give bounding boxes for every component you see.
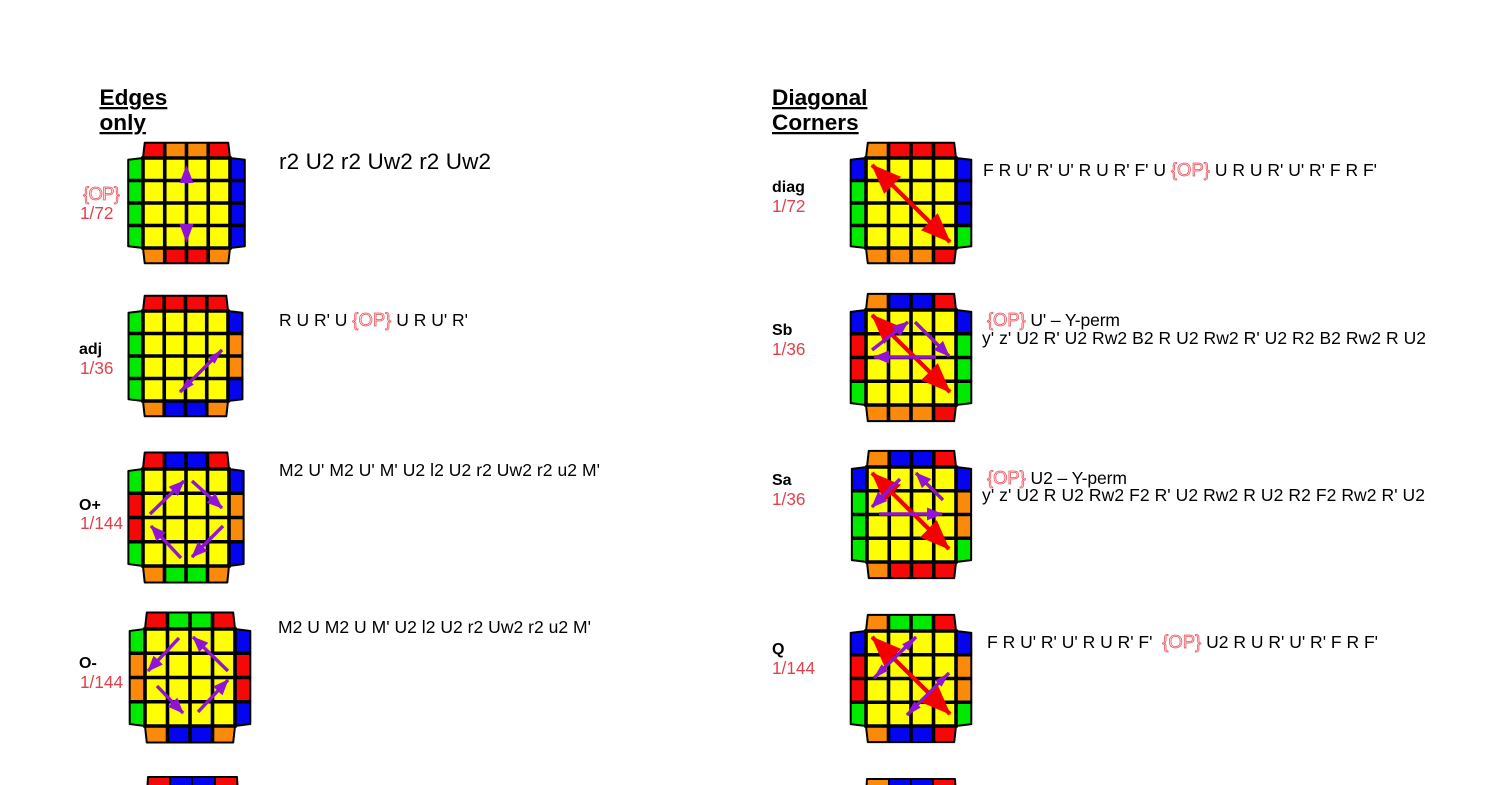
heading: Diagonal Corners bbox=[772, 85, 867, 135]
arrows: Sb bbox=[872, 315, 950, 392]
case label: O-: O- bbox=[79, 655, 97, 672]
cube: O+ bbox=[128, 453, 244, 582]
case label: Q: 1/144 bbox=[772, 658, 815, 678]
cube: Sb bbox=[851, 294, 971, 421]
case label: O-: 1/144 bbox=[80, 672, 123, 692]
case label: Q bbox=[772, 641, 815, 678]
case label: diag: 1/72 bbox=[772, 196, 805, 216]
arrows: O+ cycle bbox=[150, 481, 223, 558]
cube: diag bbox=[851, 143, 971, 263]
case label: O+ bbox=[79, 497, 123, 533]
algorithm: Sb: {OP} U' – Y-perm bbox=[987, 309, 1120, 330]
algorithm: Q: F R U' R' U' R U R' F' {OP} U2 R U R' U' R' F R F' bbox=[987, 631, 1378, 652]
cube: O- bbox=[130, 613, 250, 742]
algorithm: adj: R U R' U {OP} U R U' R' bbox=[279, 309, 468, 330]
case label: diag: diag bbox=[772, 179, 805, 196]
heading: Edges only: Edges bbox=[100, 85, 167, 110]
case label: O+: O+ bbox=[79, 497, 101, 514]
cube: Q bbox=[851, 615, 971, 742]
case label: Sb bbox=[772, 322, 805, 359]
case label: O+: 1/144 bbox=[80, 513, 123, 533]
algorithm: OP: r2 U2 r2 Uw2 r2 Uw2 bbox=[279, 149, 491, 174]
cube: edges OP bbox=[128, 143, 245, 263]
algorithm: diag: F R U' R' U' R U R' F' U {OP} U R U R' U' R' F R F' bbox=[983, 159, 1377, 180]
case label: Q: Q bbox=[772, 641, 784, 658]
case label: Sb: Sb bbox=[772, 322, 793, 339]
arrows: O- cycle bbox=[148, 637, 228, 713]
cube: partial next edges case bbox=[147, 777, 238, 785]
heading: Diagonal Corners: Diagonal bbox=[772, 85, 867, 110]
case label: adj: adj bbox=[79, 341, 102, 358]
arrows: edges OP swap bbox=[180, 165, 194, 243]
algorithm: Sa bbox=[982, 467, 1425, 505]
heading: Edges only: only bbox=[100, 110, 146, 135]
case label: OP parity: {OP} bbox=[83, 183, 120, 204]
arrow: diag corner swap bbox=[872, 165, 950, 242]
cube: Sa bbox=[852, 451, 971, 578]
heading: Edges only bbox=[100, 85, 167, 135]
case label: OP parity: 1/72 bbox=[80, 203, 113, 223]
arrows: Q bbox=[872, 637, 950, 715]
case label: Sa: 1/36 bbox=[772, 489, 805, 509]
algorithm: Sb bbox=[982, 309, 1426, 348]
case label: diag bbox=[772, 179, 805, 216]
algorithm: O+: M2 U' M2 U' M' U2 l2 U2 r2 Uw2 r2 u2 M' bbox=[279, 460, 600, 480]
case label: Sa bbox=[772, 472, 805, 509]
cube: adj bbox=[129, 296, 242, 416]
heading: Diagonal Corners: Corners bbox=[772, 110, 859, 135]
algorithm: O-: M2 U M2 U M' U2 l2 U2 r2 Uw2 r2 u2 M' bbox=[278, 617, 591, 637]
algorithm: Sa: y' z' U2 R U2 Rw2 F2 R' U2 Rw2 R U2 R2 F2 Rw2 R' U2 bbox=[982, 485, 1425, 505]
case label: Sa: Sa bbox=[772, 472, 792, 489]
case label: Sb: 1/36 bbox=[772, 339, 805, 359]
arrows: Sa bbox=[872, 473, 949, 549]
cube: partial next diagonal case bbox=[866, 779, 956, 785]
algorithm: Sb: y' z' U2 R' U2 Rw2 B2 R U2 Rw2 R' U2 R2 B2 Rw2 R U2 bbox=[982, 328, 1426, 348]
case label: adj bbox=[79, 341, 113, 378]
case label: OP parity bbox=[80, 183, 120, 223]
arrow: adj swap bbox=[180, 350, 222, 392]
algorithm: Sa: {OP} U2 – Y-perm bbox=[987, 467, 1127, 488]
case label: O- bbox=[79, 655, 123, 692]
case label: adj: 1/36 bbox=[80, 358, 113, 378]
